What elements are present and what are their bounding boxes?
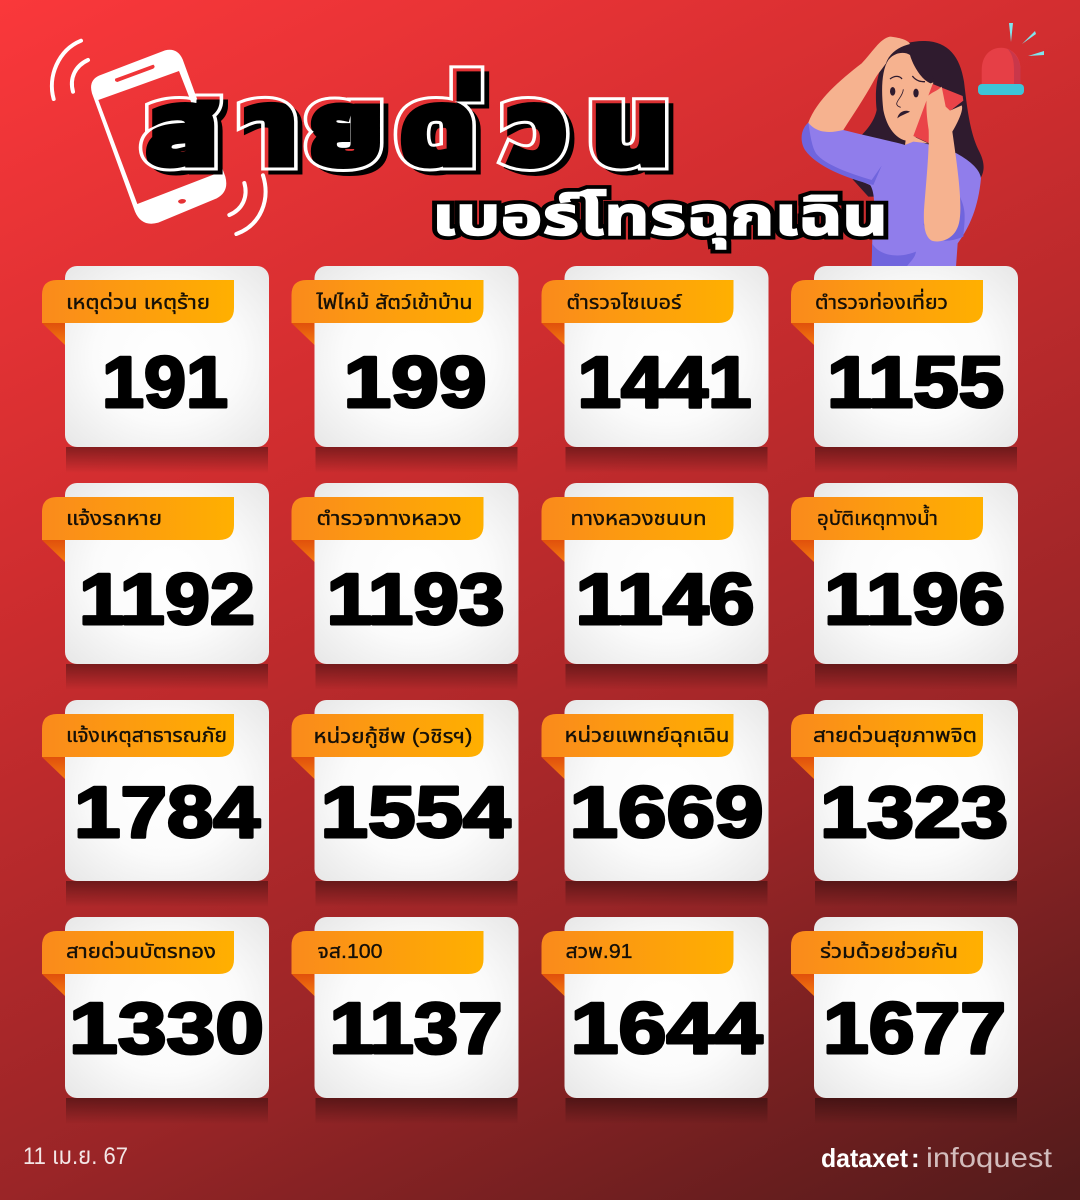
card: ร่วมด้วยช่วยกัน 1677: [791, 917, 1018, 1124]
card: ตำรวจทางหลวง 1193: 1193: [326, 560, 504, 640]
logo: dataxet infoquest: infoquest: [926, 1142, 1052, 1173]
card: ร่วมด้วยช่วยกัน 1677: ร่วมด้วยช่วยกัน: [820, 940, 958, 963]
card: หน่วยแพทย์ฉุกเฉิน 1669: [542, 700, 768, 907]
logo: dataxet infoquest: [821, 1142, 1052, 1173]
card: หน่วยกู้ชีพ (วชิรฯ) 1554: หน่วยกู้ชีพ (วชิรฯ): [314, 725, 472, 749]
card: ตำรวจท่องเที่ยว 1155: ตำรวจท่องเที่ยว: [815, 288, 948, 314]
card: ตำรวจไซเบอร์ 1441: ตำรวจไซเบอร์: [566, 292, 683, 314]
card: แจ้งเหตุสาธารณภัย 1784: [42, 700, 269, 907]
card: ตำรวจท่องเที่ยว 1155: 1155: [827, 343, 1004, 423]
card: เหตุด่วน เหตุร้าย 191: เหตุด่วน เหตุร้าย: [66, 291, 210, 314]
card: แจ้งรถหาย 1192: แจ้งรถหาย: [66, 507, 162, 530]
card: สวพ.91 1644: [542, 917, 768, 1124]
card: ไฟไหม้ สัตว์เข้าบ้าน 199: [292, 266, 518, 473]
card: ตำรวจไซเบอร์ 1441: 1441: [578, 343, 752, 423]
card: ตำรวจท่องเที่ยว 1155: [791, 266, 1018, 473]
card: ทางหลวงชนบท 1146: [542, 483, 768, 690]
card: สายด่วนบัตรทอง 1330: สายด่วนบัตรทอง: [66, 940, 216, 963]
card: ทางหลวงชนบท 1146: ทางหลวงชนบท: [570, 508, 706, 530]
card: ร่วมด้วยช่วยกัน 1677: 1677: [823, 989, 1006, 1069]
card: อุบัติเหตุทางน้ำ 1196: [791, 483, 1018, 690]
card: แจ้งรถหาย 1192: [42, 483, 269, 690]
card: ไฟไหม้ สัตว์เข้าบ้าน 199: ไฟไหม้ สัตว์เข้าบ้าน: [315, 291, 473, 314]
card: แจ้งเหตุสาธารณภัย 1784: แจ้งเหตุสาธารณภัย: [66, 724, 227, 747]
illustration: worried woman on phone: [802, 37, 984, 267]
card: สายด่วนสุขภาพจิต 1323: [791, 700, 1018, 907]
card: จส.100 1137: 1137: [330, 989, 502, 1069]
card: ทางหลวงชนบท 1146: 1146: [576, 560, 754, 640]
card: หน่วยกู้ชีพ (วชิรฯ) 1554: [292, 700, 518, 907]
card: หน่วยแพทย์ฉุกเฉิน 1669: 1669: [570, 773, 764, 853]
card: สายด่วนบัตรทอง 1330: [42, 917, 269, 1124]
card: อุบัติเหตุทางน้ำ 1196: 1196: [824, 560, 1005, 640]
card: หน่วยแพทย์ฉุกเฉิน 1669: หน่วยแพทย์ฉุกเฉิน: [564, 724, 730, 747]
card: ตำรวจไซเบอร์ 1441: [542, 266, 768, 473]
card: ไฟไหม้ สัตว์เข้าบ้าน 199: 199: [344, 343, 486, 423]
icon: ringing phone: [52, 41, 266, 234]
title: สายด่วน: สายด่วน: [149, 72, 676, 191]
logo: dataxet infoquest: :: [911, 1143, 920, 1173]
card: แจ้งเหตุสาธารณภัย 1784: 1784: [74, 773, 260, 853]
card: เหตุด่วน เหตุร้าย 191: 191: [102, 343, 228, 423]
card: เหตุด่วน เหตุร้าย 191: [42, 266, 269, 473]
subtitle: เบอร์โทรฉุกเฉิน: เบอร์โทรฉุกเฉิน: [432, 187, 888, 249]
card: อุบัติเหตุทางน้ำ 1196: อุบัติเหตุทางน้ำ: [817, 504, 938, 530]
card: สายด่วนสุขภาพจิต 1323: 1323: [820, 773, 1008, 853]
subtitle: เบอร์โทรฉุกเฉิน: เบอร์โทรฉุกเฉิน: [432, 187, 888, 249]
card: หน่วยกู้ชีพ (วชิรฯ) 1554: 1554: [320, 773, 510, 853]
card: แจ้งรถหาย 1192: 1192: [79, 560, 255, 640]
card: สายด่วนสุขภาพจิต 1323: สายด่วนสุขภาพจิต: [813, 724, 977, 747]
card: สายด่วนบัตรทอง 1330: 1330: [69, 989, 264, 1069]
icon: emergency siren: [978, 23, 1044, 95]
date: 11 เม.ย. 67: [23, 1143, 128, 1170]
card: จส.100 1137: จส.100: [318, 941, 382, 963]
card: ตำรวจทางหลวง 1193: ตำรวจทางหลวง: [316, 508, 462, 530]
card: สวพ.91 1644: สวพ.91: [566, 941, 632, 963]
card: ตำรวจทางหลวง 1193: [292, 483, 518, 690]
card: สวพ.91 1644: 1644: [570, 989, 762, 1069]
card: จส.100 1137: [292, 917, 518, 1124]
logo: dataxet infoquest: dataxet: [821, 1143, 908, 1173]
